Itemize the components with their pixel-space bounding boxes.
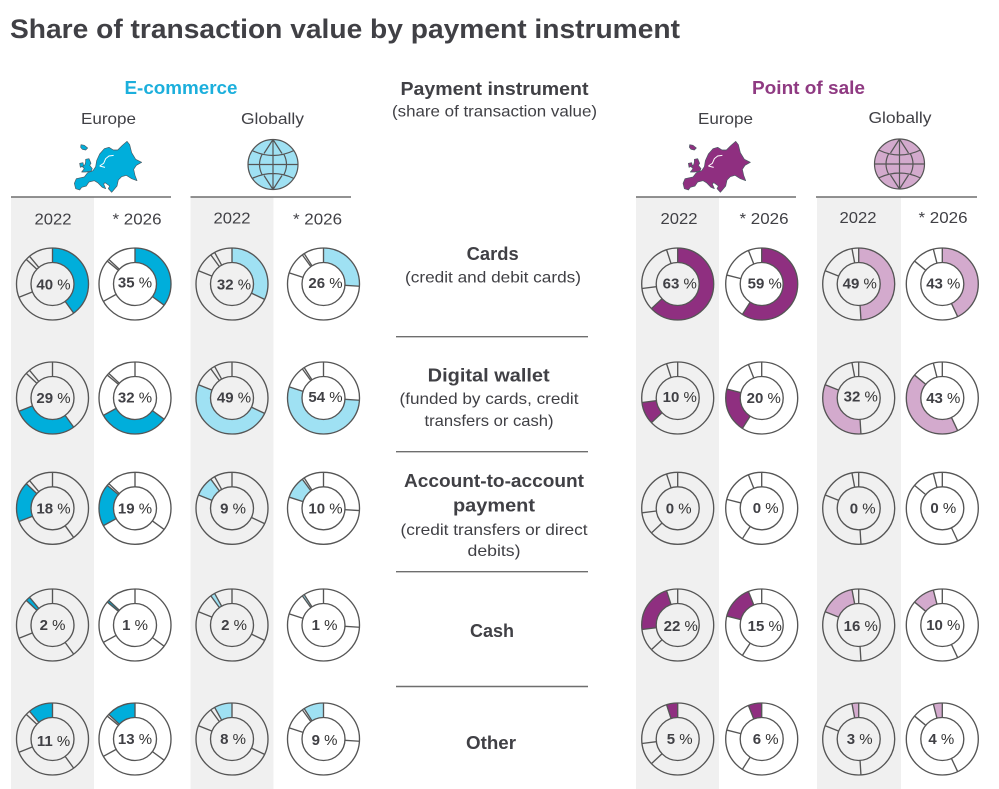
donut: cash 2% [16, 589, 88, 661]
column: e-commerce global 2026 [288, 248, 360, 775]
heading: Europe: Europe [698, 111, 753, 128]
heading: e-commerce group [74, 78, 304, 192]
label: Digital wallet: Digital wallet [428, 366, 550, 386]
donut: cards 26%: 26 % [308, 275, 343, 292]
label: Account-to-account payment [400, 471, 588, 560]
donut: wallet 43% [906, 362, 978, 434]
donut: cash 2%: 2 % [40, 617, 65, 634]
heading: Payment instrument: Payment instrument [400, 79, 588, 99]
column: point of sale global 2026 [906, 248, 978, 775]
donut: cash 10% [906, 589, 978, 661]
donut: cards 63%: 63 % [663, 276, 697, 292]
donut: cash 10%: 10 % [926, 617, 960, 634]
donut: account-to-account 18% [16, 472, 88, 544]
donut: account-to-account 19%: 19 % [118, 500, 152, 517]
donut: wallet 32% [823, 362, 895, 434]
donut: wallet 10% [642, 362, 714, 434]
label: Cards: (credit and debit cards) [405, 270, 581, 286]
donut: wallet 43%: 43 % [926, 390, 960, 407]
donut: wallet 32%: 32 % [844, 388, 878, 406]
donut: cash 2%: 2 % [221, 617, 247, 634]
donut: cards 32% [196, 248, 268, 320]
label: Cash: Cash [470, 621, 514, 641]
donut: other 3% [823, 703, 895, 775]
donut: wallet 54%: 54 % [308, 389, 343, 406]
donut: cards 49%: 49 % [843, 276, 877, 292]
donut: other 4% [906, 703, 978, 775]
heading: Globally: Globally [868, 110, 932, 127]
donut: wallet 54% [288, 362, 360, 434]
donut: cash 2% [196, 589, 268, 661]
donut: account-to-account 0%: 0 % [930, 500, 956, 517]
donut: cash 1% [99, 589, 171, 661]
year labels: * 2026 [293, 212, 342, 228]
donut: wallet 32%: 32 % [118, 390, 152, 406]
label: Digital wallet: transfers or cash) [424, 413, 554, 430]
donut: other 5%: 5 % [667, 731, 693, 748]
donut: cards 59%: 59 % [748, 276, 782, 292]
donut: other 11% [16, 703, 88, 775]
donut: account-to-account 10% [288, 472, 360, 544]
donut: account-to-account 0%: 0 % [666, 500, 692, 517]
column: point of sale Europe 2022 [642, 248, 714, 775]
donut: wallet 20% [726, 362, 798, 434]
donut: wallet 10%: 10 % [663, 389, 697, 406]
donut: account-to-account 0%: 0 % [850, 500, 876, 517]
donut: other 9%: 9 % [312, 732, 337, 749]
year labels: * 2026 [740, 211, 789, 228]
icon: globe, light purple [874, 139, 924, 189]
donut: other 4%: 4 % [928, 731, 954, 748]
label: Digital wallet: (funded by cards, credit [400, 391, 579, 408]
donut: cards 32%: 32 % [217, 276, 251, 294]
donut: other 6% [726, 703, 798, 775]
donut: account-to-account 19% [99, 472, 171, 544]
year labels: * 2026 [112, 212, 162, 228]
donut: cash 22%: 22 % [664, 618, 698, 635]
year labels: 2022 [214, 210, 251, 228]
donut: cash 1%: 1 % [312, 617, 337, 634]
year labels: 2022 [34, 212, 72, 228]
donut: other 5% [642, 703, 714, 775]
donut: cash 15% [726, 589, 798, 661]
donut: account-to-account 0%: 0 % [753, 500, 779, 517]
heading: point of sale group [683, 78, 932, 192]
column: point of sale global 2022 [823, 248, 895, 775]
donut: wallet 29% [16, 362, 88, 434]
year labels: 2022 [840, 210, 877, 227]
label: Account-to-account payment: Account-to-account [404, 471, 584, 491]
subheading: share of transaction value: (share of transaction value) [392, 104, 597, 120]
label: Account-to-account payment: payment [453, 496, 535, 516]
heading: Europe: Europe [81, 111, 136, 128]
heading: Globally: Globally [241, 111, 304, 128]
icon: Europe map, blue [74, 141, 142, 192]
label: Other: Other [466, 733, 516, 753]
donut: cards 43% [906, 248, 978, 320]
panel: 2022 point of sale Europe band [636, 197, 719, 789]
donut: other 3%: 3 % [847, 731, 873, 748]
donut: wallet 49% [196, 362, 268, 434]
donut: wallet 29%: 29 % [36, 390, 71, 407]
donut: account-to-account 9%: 9 % [220, 500, 246, 517]
label: Cards: Cards [467, 244, 519, 264]
donut: cards 43%: 43 % [926, 276, 960, 292]
label: Digital wallet [400, 366, 579, 430]
donut: cards 26% [288, 248, 360, 320]
donut: other 9% [288, 703, 360, 775]
donut: cash 1% [288, 589, 360, 661]
donut: other 11%: 11 % [37, 733, 70, 750]
year labels [34, 210, 968, 228]
donut: cards 35%: 35 % [118, 274, 152, 292]
year labels: 2022 [660, 211, 698, 228]
icon: globe, light blue [248, 140, 298, 190]
donut: cards 59% [726, 248, 798, 320]
donut: cash 15%: 15 % [748, 618, 782, 635]
icon: Europe map, purple [683, 141, 750, 192]
donut: wallet 32% [99, 362, 171, 434]
donut: other 13% [99, 703, 171, 775]
donut: account-to-account 0% [823, 472, 895, 544]
donut: cards 40%: 40 % [36, 276, 71, 294]
panel: 2022 e-commerce global band [190, 197, 274, 789]
donut: cards 49% [823, 248, 895, 320]
year labels: * 2026 [918, 210, 968, 227]
donut: cards 35% [99, 248, 171, 320]
column: point of sale Europe 2026 [726, 248, 798, 775]
column: e-commerce global 2022 [196, 248, 268, 775]
donut: other 8%: 8 % [220, 731, 246, 748]
donut: other 13%: 13 % [118, 731, 152, 748]
donut: other 6%: 6 % [753, 731, 779, 748]
label: Account-to-account payment: debits) [468, 543, 520, 560]
donut: wallet 49%: 49 % [217, 390, 251, 406]
label: Cards [405, 244, 581, 286]
panel: payment instrument labels [392, 79, 597, 753]
panel: 2022 e-commerce Europe band [11, 197, 94, 789]
donut: account-to-account 10%: 10 % [308, 500, 343, 517]
label: Account-to-account payment: (credit transfers or direct [400, 522, 588, 539]
donut: cash 22% [642, 589, 714, 661]
heading: E-commerce: E-commerce [124, 78, 238, 98]
donut: cash 16%: 16 % [844, 618, 878, 635]
title: Share of transaction value by payment instrument [10, 14, 680, 44]
donut: account-to-account 18%: 18 % [36, 500, 71, 517]
donut: cash 1%: 1 % [122, 617, 148, 634]
donut: account-to-account 9% [196, 472, 268, 544]
donut: wallet 20%: 20 % [747, 390, 781, 407]
donut: account-to-account 0% [906, 472, 978, 544]
donut: other 8% [196, 703, 268, 775]
column: e-commerce Europe 2022 [16, 248, 88, 775]
column: e-commerce Europe 2026 [99, 248, 171, 775]
donut: account-to-account 0% [642, 472, 714, 544]
donut: account-to-account 0% [726, 472, 798, 544]
donut: cards 40% [16, 248, 88, 320]
heading: Point of sale: Point of sale [752, 78, 865, 98]
donut: cash 16% [823, 589, 895, 661]
panel: 2022 point of sale global band [817, 197, 901, 789]
donut: cards 63% [642, 248, 714, 320]
